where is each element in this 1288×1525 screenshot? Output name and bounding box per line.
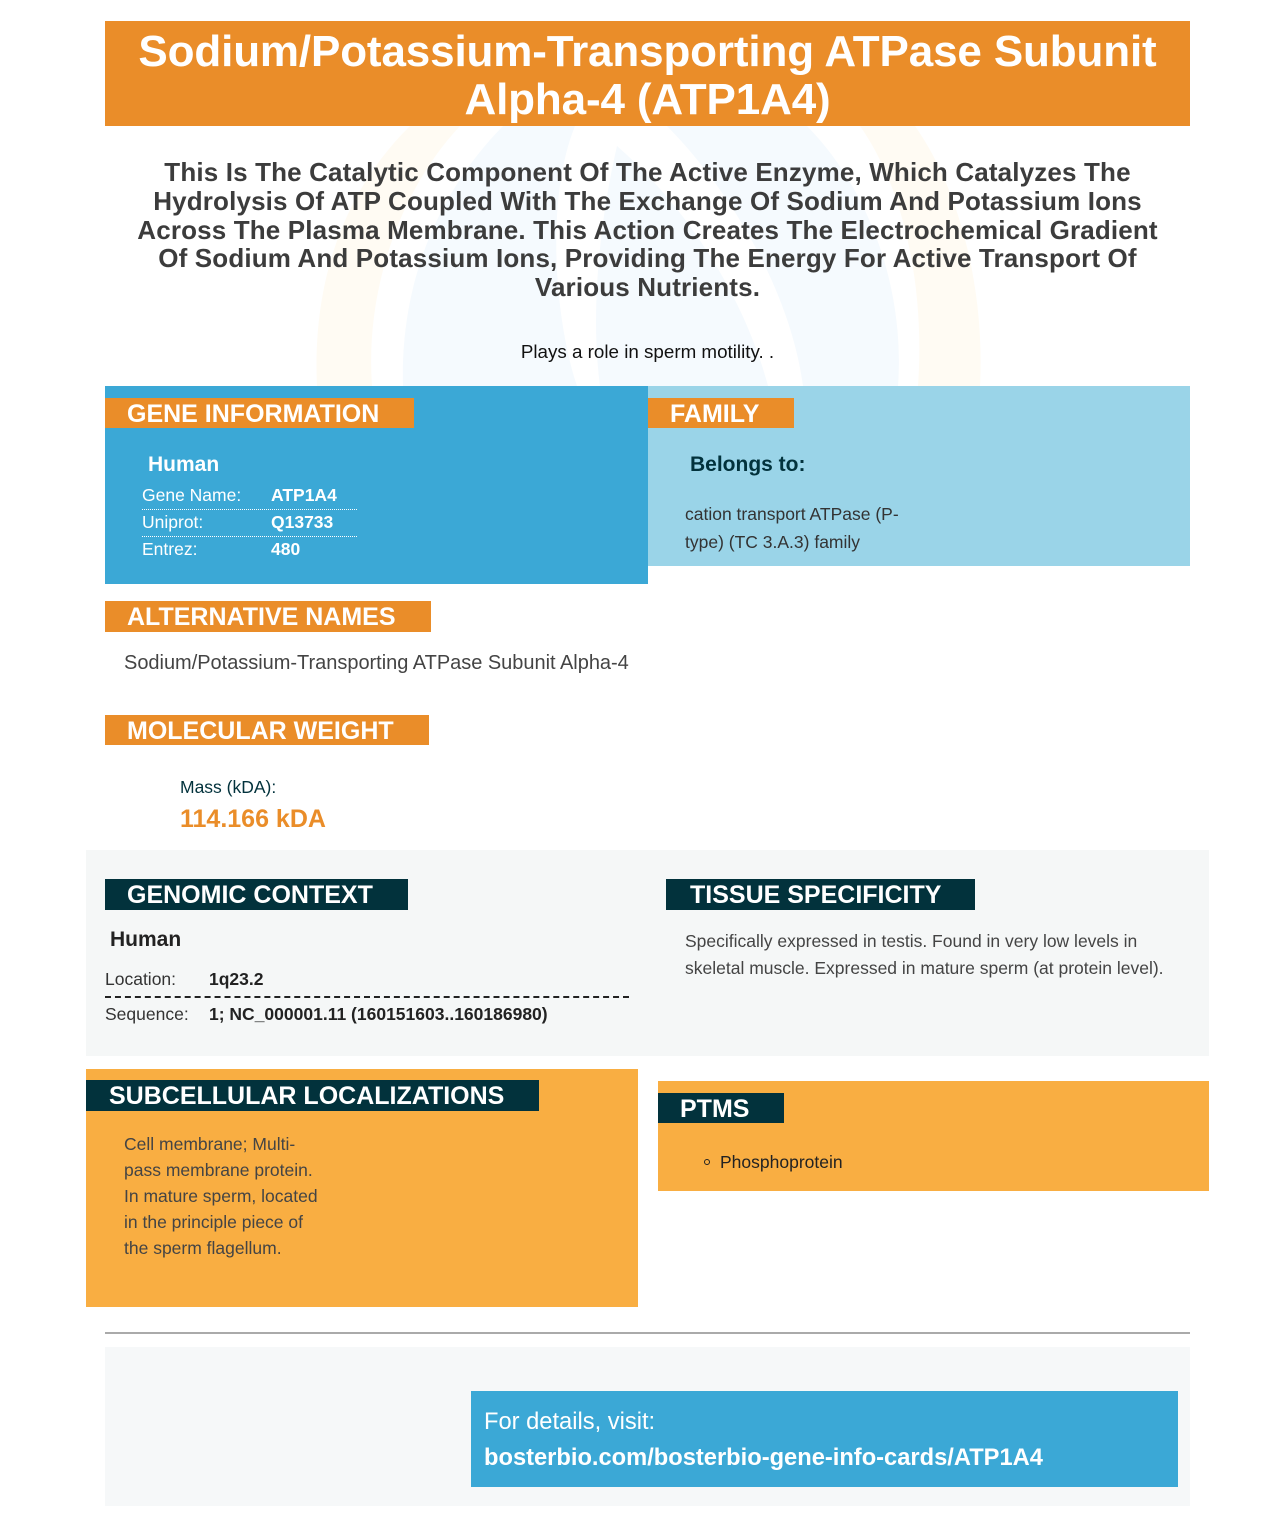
heading: ptms: [658, 1093, 784, 1123]
watermark logo: [316, 126, 980, 386]
function note: Plays a role in sperm motility. .: [521, 341, 774, 362]
localization text: In mature sperm, located: [124, 1186, 318, 1206]
localization text: in the principle piece of: [124, 1212, 303, 1232]
description: Various Nutrients.: [535, 272, 760, 302]
heading: ptms: PTMS: [680, 1095, 749, 1123]
uniprot row: [142, 510, 357, 537]
gene name row: [142, 482, 357, 510]
entrez row: Entrez:: [142, 539, 197, 559]
bullet marker: [704, 1159, 710, 1165]
mass value: 114.166 kDA: [180, 805, 326, 833]
heading: molecular weight: MOLECULAR WEIGHT: [127, 717, 394, 745]
description: Hydrolysis Of ATP Coupled With The Exchange Of Sodium And Potassium Ions: [153, 186, 1142, 216]
tissue specificity text: Specifically expressed in testis. Found in very low levels in: [685, 931, 1137, 951]
heading: alternative names: ALTERNATIVE NAMES: [127, 603, 396, 631]
localization text: [124, 1134, 318, 1258]
family text: cation transport ATPase (P-: [685, 504, 899, 524]
localization text: the sperm flagellum.: [124, 1238, 282, 1258]
footer panel: [105, 1347, 1190, 1506]
callout: details link: [471, 1391, 1178, 1487]
localization text: pass membrane protein.: [124, 1160, 313, 1180]
description: Of Sodium And Potassium Ions, Providing The Energy For Active Transport Of: [158, 243, 1137, 273]
heading: subcellular localizations: SUBCELLULAR LOCALIZATIONS: [109, 1082, 504, 1110]
heading: family: [648, 398, 794, 428]
title: Alpha-4 (ATP1A4): [464, 75, 831, 124]
family text: [685, 504, 899, 552]
description: Across The Plasma Membrane. This Action Creates The Electrochemical Gradient: [137, 215, 1158, 245]
description: This Is The Catalytic Component Of The Active Enzyme, Which Catalyzes The: [164, 157, 1131, 187]
panel: family: [648, 386, 1190, 566]
title: Sodium/Potassium-Transporting ATPase Subunit: [138, 27, 1157, 76]
uniprot row: Q13733: [271, 512, 333, 532]
panel: genomic context and tissue specificity: [86, 850, 1209, 1056]
mass label: Mass (kDA):: [180, 777, 276, 797]
species label: Human: [148, 453, 219, 476]
localization text: Cell membrane; Multi-: [124, 1134, 295, 1154]
panel: gene information: [105, 386, 648, 584]
sequence row: 1; NC_000001.11 (160151603..160186980): [209, 1004, 548, 1024]
location row: Location:: [105, 969, 176, 989]
uniprot row: Uniprot:: [142, 512, 203, 532]
tissue specificity text: skeletal muscle. Expressed in mature sperm (at protein level).: [685, 958, 1164, 978]
heading: genomic context: GENOMIC CONTEXT: [127, 881, 373, 909]
gene name row: Gene Name:: [142, 485, 241, 505]
sequence row: Sequence:: [105, 1004, 189, 1024]
species label: Human: [110, 928, 181, 951]
family text: type) (TC 3.A.3) family: [685, 532, 860, 552]
alternative names text: Sodium/Potassium-Transporting ATPase Subunit Alpha-4: [124, 652, 629, 674]
panel: ptms: [658, 1081, 1209, 1191]
callout url: bosterbio.com/bosterbio-gene-info-cards/ATP1A4: [484, 1445, 1043, 1471]
location row: [105, 966, 629, 998]
title: [138, 27, 1157, 124]
panel: subcellular localizations: [86, 1069, 638, 1307]
heading: gene information: GENE INFORMATION: [127, 400, 379, 428]
callout label: For details, visit:: [484, 1409, 655, 1435]
entrez row: [142, 539, 300, 559]
description: [137, 157, 1158, 302]
title banner: [105, 21, 1190, 126]
gene name row: ATP1A4: [271, 485, 337, 505]
heading: family: FAMILY: [670, 400, 759, 428]
ptm text: Phosphoprotein: [720, 1152, 843, 1172]
entrez row: 480: [271, 539, 300, 559]
location row: 1q23.2: [209, 969, 263, 989]
tissue specificity text: [685, 931, 1164, 978]
heading: tissue specificity: TISSUE SPECIFICITY: [690, 881, 941, 909]
belongs to label: Belongs to:: [690, 453, 806, 476]
